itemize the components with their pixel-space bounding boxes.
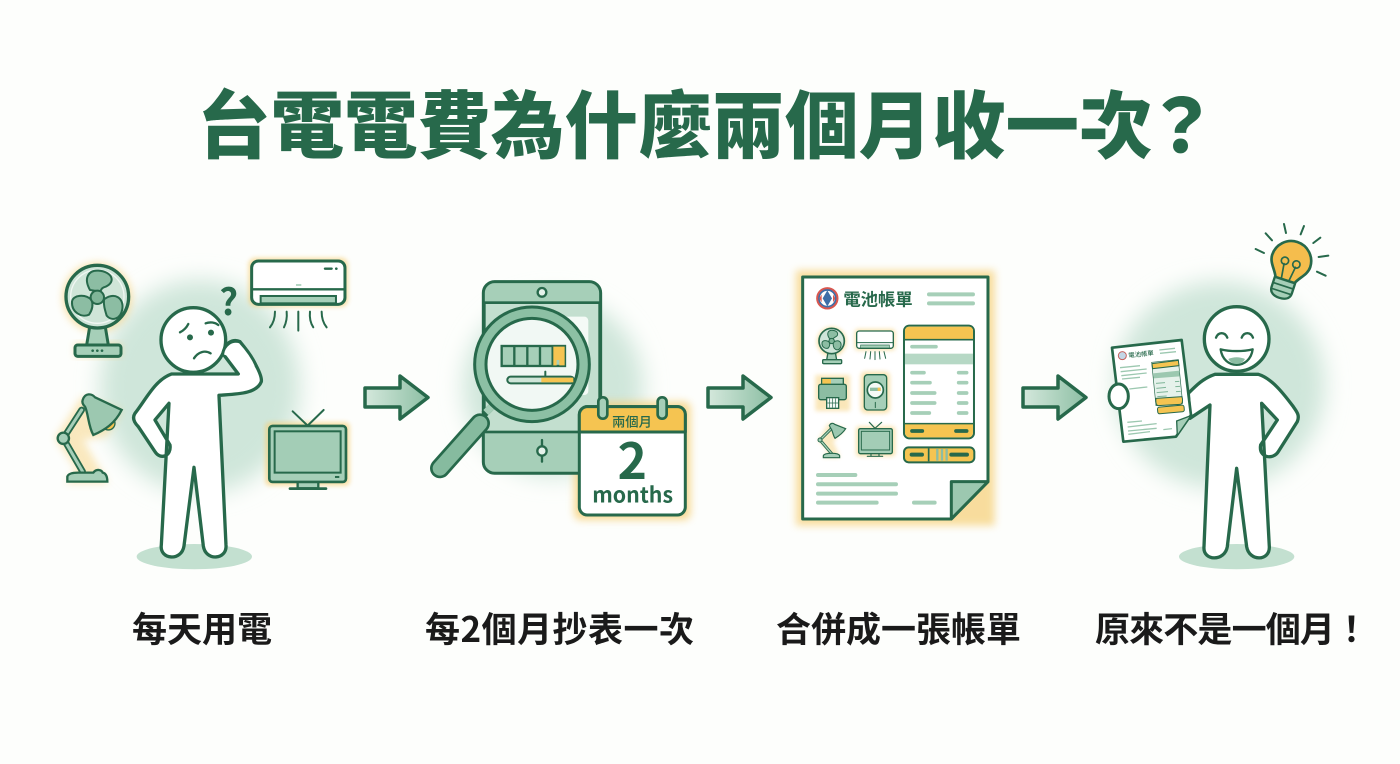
months: months bbox=[592, 478, 673, 509]
ground shadow bbox=[137, 544, 252, 569]
bill header lines bbox=[929, 294, 973, 303]
bill title: 電池帳單 bbox=[843, 286, 913, 311]
bill glow bbox=[796, 270, 995, 526]
calendar header text: 兩個月 bbox=[612, 412, 652, 431]
label: combined bill: 合併成一張帳單 bbox=[776, 602, 1021, 653]
label: realisation: 原來不是一個月！ bbox=[1095, 602, 1369, 653]
hand on head bbox=[223, 341, 257, 367]
meter device bbox=[483, 282, 601, 473]
arrow 2 bbox=[708, 376, 771, 419]
bill sheet bbox=[803, 277, 988, 519]
logo bbox=[817, 288, 837, 308]
small tv bbox=[856, 422, 895, 456]
person thinking bbox=[134, 272, 261, 557]
title: 台電電費為什麼兩個月收一次？ bbox=[197, 68, 1218, 174]
hand holding bill bbox=[1109, 384, 1128, 409]
icon: air conditioner bbox=[248, 258, 348, 331]
calendar bbox=[579, 397, 685, 515]
face bbox=[1216, 333, 1253, 338]
background blob bbox=[100, 280, 300, 493]
panel: combined bill bbox=[796, 270, 995, 526]
bill total bar bbox=[904, 447, 974, 462]
question mark: ? bbox=[219, 272, 238, 326]
panel: meter reading bbox=[440, 282, 691, 520]
held bill title: 電池帳單 bbox=[1128, 348, 1154, 360]
panel: realisation bbox=[1109, 224, 1328, 569]
small lamp bbox=[818, 423, 846, 458]
bill table bbox=[904, 326, 974, 438]
magnifying glass bbox=[440, 307, 589, 468]
small printer bbox=[815, 375, 850, 411]
label: daily use: 每天用電 bbox=[132, 602, 272, 653]
small meter bbox=[861, 372, 890, 413]
background blob bbox=[463, 297, 643, 477]
background blob bbox=[1115, 282, 1325, 488]
folded corner bbox=[951, 482, 988, 519]
label: meter reading every two months: 每2個月抄表一次 bbox=[425, 602, 694, 653]
small appliance icons bbox=[815, 327, 895, 458]
small air conditioner bbox=[855, 329, 895, 360]
panel: daily electricity use bbox=[55, 258, 350, 569]
icon: fan bbox=[63, 263, 132, 357]
small fan bbox=[817, 327, 846, 364]
icon: light bulb bbox=[1256, 224, 1328, 304]
icon: desk lamp bbox=[55, 394, 122, 483]
person smiling bbox=[1188, 307, 1298, 558]
glow behind calendar bbox=[574, 402, 691, 520]
arrow 3 bbox=[1023, 376, 1086, 419]
head bbox=[161, 308, 226, 372]
held bill bbox=[1112, 340, 1191, 442]
ground shadow bbox=[1179, 544, 1294, 569]
arrow 1 bbox=[365, 376, 428, 419]
face bbox=[187, 334, 193, 340]
bill footer lines bbox=[818, 475, 935, 503]
number 2: 2 bbox=[618, 422, 647, 494]
head bbox=[1204, 307, 1269, 371]
icon: television bbox=[265, 410, 350, 489]
